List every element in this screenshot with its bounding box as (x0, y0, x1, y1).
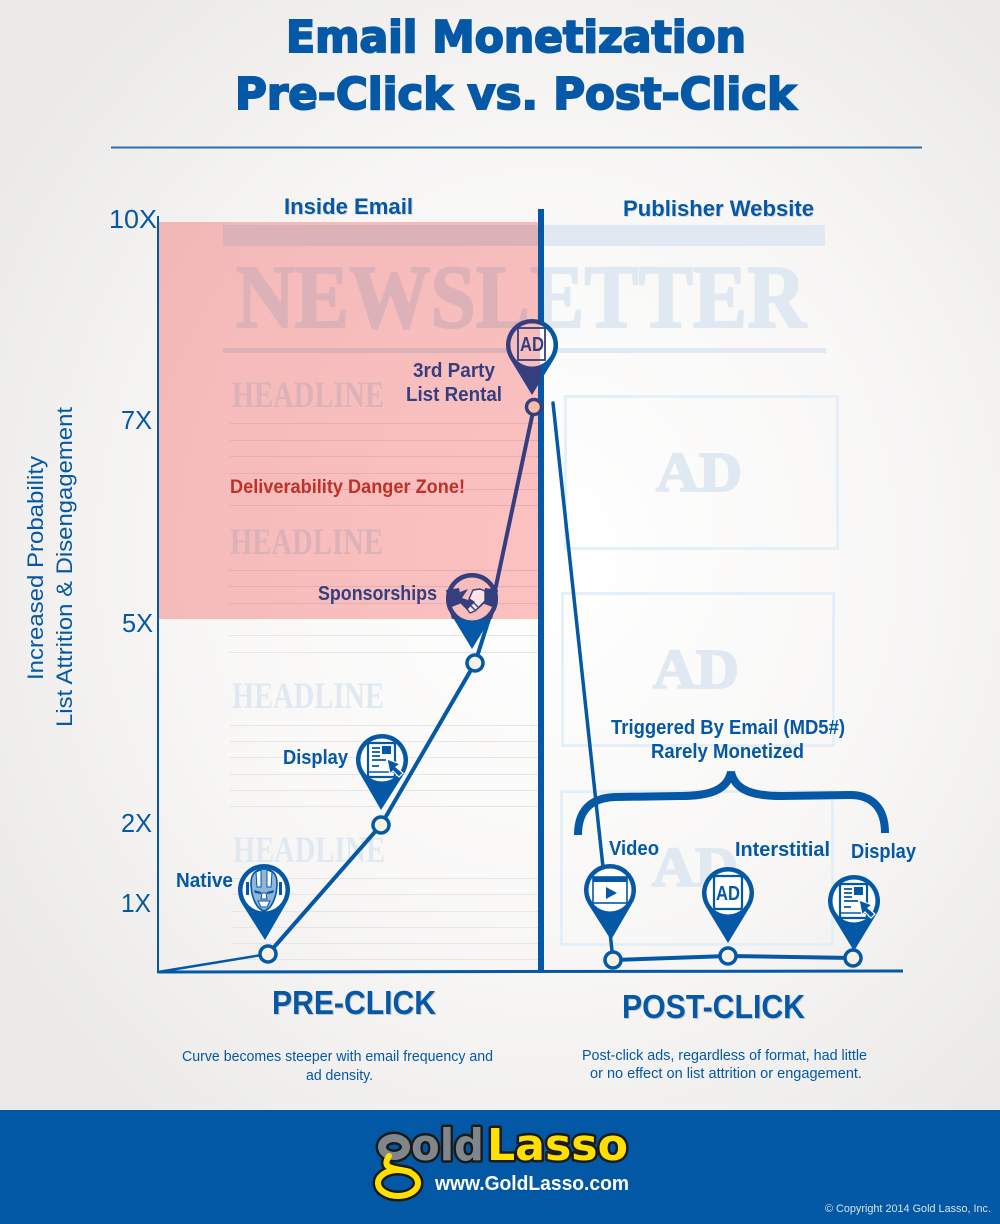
labels: post-click points: Interstitial (735, 839, 830, 861)
y axis ticks (109, 204, 157, 918)
labels: post-click points: Triggered By Email (MD5#) (611, 717, 845, 739)
labels: post-click points (609, 717, 917, 863)
pin: third party list rental (506, 319, 558, 395)
pin: display post-click (828, 875, 880, 951)
logo: Lasso (487, 1120, 628, 1171)
pin: video (584, 864, 636, 940)
chart axes (158, 209, 903, 973)
pin: interstitial (702, 867, 754, 943)
panel: faded newsletter backdrop: HEADLINE (230, 522, 383, 563)
curve nodes (260, 400, 861, 968)
labels: pre-click points: List Rental (406, 384, 502, 406)
panel: faded newsletter backdrop: AD (653, 639, 739, 701)
labels: post-click points: Display (851, 841, 917, 863)
pin: display pre-click (356, 734, 408, 810)
labels: post-click points: Rarely Monetized (651, 741, 804, 763)
y axis title (23, 407, 77, 727)
logo (378, 1120, 628, 1196)
y axis ticks: 1X (121, 888, 151, 918)
icon: logo letter g (378, 1138, 418, 1196)
panel: faded newsletter backdrop: AD (656, 442, 742, 504)
title (235, 12, 798, 120)
panel: faded newsletter backdrop: NEWSLETTER (236, 248, 807, 347)
panel: danger zone (159, 222, 540, 619)
text: pre-click caption: ad density. (306, 1067, 373, 1084)
pre-click curve (158, 407, 534, 972)
text: pre-click caption: Curve becomes steeper with email frequency and (182, 1048, 493, 1065)
panel: faded newsletter backdrop (223, 225, 838, 960)
post-click curve (553, 403, 853, 960)
labels: pre-click points (176, 360, 502, 892)
panel: faded newsletter backdrop: AD (652, 837, 738, 899)
y axis ticks: 10X (109, 204, 157, 234)
title: Email Monetization (286, 12, 746, 63)
text: post-click caption: Post-click ads, regardless of format, had little (582, 1047, 867, 1064)
y axis ticks: 5X (122, 608, 153, 638)
labels: pre-click points: Native (176, 870, 233, 892)
heading: publisher website: Publisher Website (623, 196, 814, 221)
copyright: © Copyright 2014 Gold Lasso, Inc. (825, 1203, 991, 1215)
heading: pre-click: PRE-CLICK (272, 984, 436, 1021)
title: Pre-Click vs. Post-Click (235, 69, 798, 120)
pin: third party list rental: AD (520, 334, 544, 356)
panel: faded newsletter backdrop: HEADLINE (232, 676, 384, 717)
y axis title: Increased Probability (23, 456, 48, 680)
labels: pre-click points: Sponsorships (318, 583, 437, 605)
y axis ticks: 7X (121, 405, 152, 435)
labels: pre-click points: Display (283, 747, 349, 769)
heading: post-click: POST-CLICK (622, 988, 805, 1025)
text: post-click caption: or no effect on list attrition or engagement. (590, 1065, 862, 1082)
pin: native (238, 864, 290, 940)
heading: inside email: Inside Email (284, 194, 413, 219)
footer band (0, 1110, 1000, 1224)
y axis title: List Attrition & Disengagement (52, 407, 77, 727)
logo url: www.GoldLasso.com (434, 1173, 629, 1195)
brace (578, 772, 885, 835)
pin: sponsorships (446, 573, 498, 649)
panel: faded newsletter backdrop: HEADLINE (232, 375, 384, 416)
logo: old (411, 1120, 484, 1171)
pin: interstitial: AD (716, 883, 740, 905)
panel: faded newsletter backdrop: HEADLINE (233, 830, 385, 871)
text: pre-click caption (182, 1048, 493, 1084)
y axis ticks: 2X (121, 808, 152, 838)
danger zone label: Deliverability Danger Zone! (230, 477, 465, 498)
text: post-click caption (582, 1047, 867, 1082)
labels: pre-click points: 3rd Party (413, 360, 496, 382)
labels: post-click points: Video (609, 838, 659, 860)
